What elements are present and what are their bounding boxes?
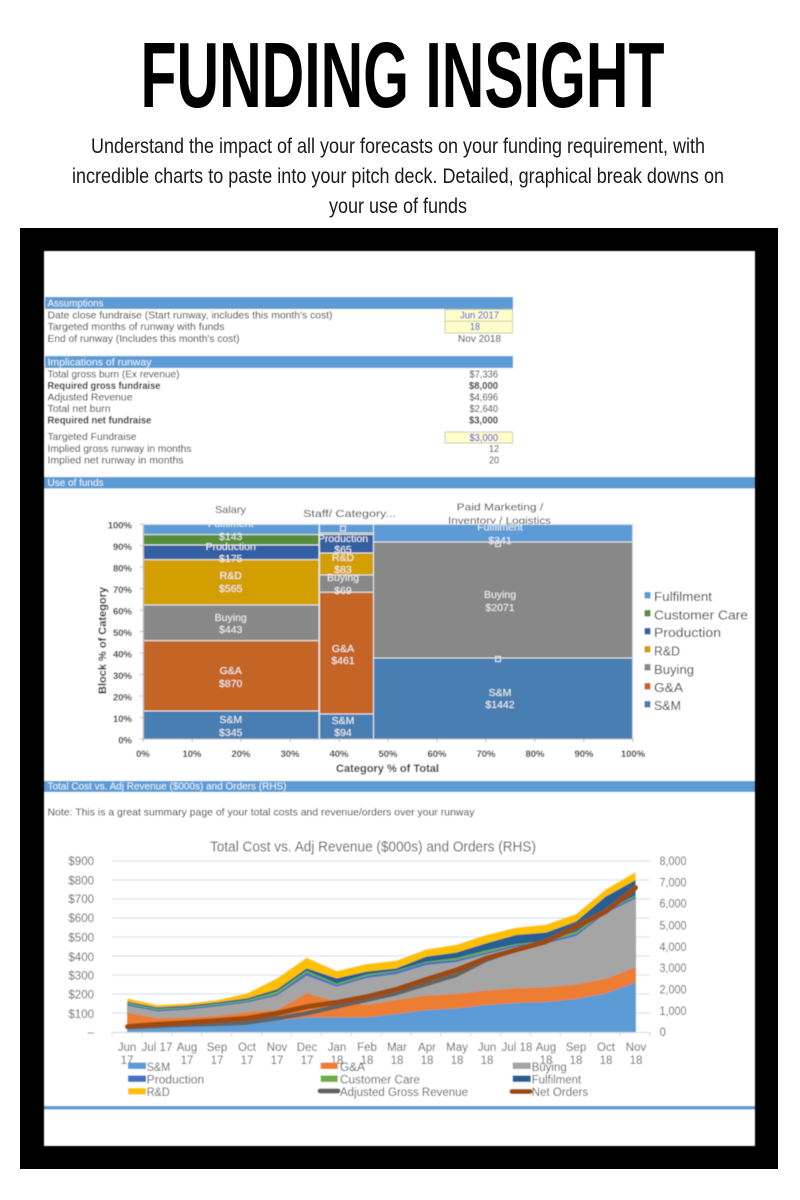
left axis labels: – — [88, 1027, 95, 1039]
mosaic axes: 10% — [182, 749, 202, 760]
panel: implications of runway: Targeted Fundraise — [48, 432, 137, 443]
mosaic legend: Production — [654, 625, 721, 640]
mosaic axes: 0% — [118, 736, 133, 746]
mosaic axes: 60% — [113, 606, 133, 618]
column headings: Inventory / Logistics — [448, 515, 551, 527]
panel: implications of runway — [45, 356, 513, 466]
mosaic axes: 50% — [378, 749, 398, 760]
area chart legend: S&M — [147, 1062, 170, 1074]
panel: implications of runway: Total gross burn (Ex revenue) — [48, 370, 180, 380]
mosaic value labels: $83 — [334, 564, 352, 576]
panel: assumptions: 18 — [470, 322, 480, 333]
area chart legend: G&A — [340, 1062, 365, 1074]
panel: assumptions — [45, 297, 513, 345]
mosaic axes: 20% — [113, 692, 133, 704]
month labels: Aug — [177, 1042, 197, 1054]
mosaic axes: 70% — [113, 585, 133, 596]
section heading: total cost vs adj revenue: Total Cost vs. Adj Revenue ($000s) and Orders (RHS) — [48, 782, 286, 792]
mosaic axes: 30% — [280, 749, 300, 760]
subtitle text block: your use of funds — [329, 195, 467, 218]
column headings — [215, 502, 551, 527]
black frame — [20, 228, 778, 1169]
area chart legend — [128, 1062, 588, 1099]
mosaic axes: 0% — [136, 749, 150, 760]
mosaic value labels: $94 — [334, 727, 352, 739]
mosaic value labels: Fulfilment — [208, 518, 254, 530]
month labels: Apr — [418, 1042, 436, 1054]
gridlines — [112, 861, 650, 1013]
left axis labels: $800 — [68, 876, 94, 888]
right axis labels: 0 — [660, 1027, 666, 1039]
mosaic column: staff — [320, 524, 374, 739]
left axis labels: $400 — [68, 952, 94, 964]
mosaic axes: Category % of Total — [336, 763, 439, 775]
month labels: 18 — [600, 1055, 612, 1067]
month labels: Mar — [387, 1042, 407, 1054]
column headings: Staff/ Category... — [303, 508, 396, 520]
month labels — [118, 1042, 646, 1067]
mosaic value labels: Production — [318, 533, 368, 545]
mosaic axes: 20% — [231, 749, 251, 760]
mosaic value labels: $461 — [331, 655, 355, 667]
panel: implications of runway: Total net burn — [48, 404, 111, 415]
mosaic value labels: Buying — [215, 612, 247, 624]
panel: assumptions: Jun 2017 — [460, 310, 499, 322]
panel: implications of runway: Implied gross runway in months — [48, 444, 192, 455]
month labels: Sep — [566, 1042, 586, 1054]
panel: implications of runway: 12 — [489, 444, 499, 455]
section heading: total cost vs adj revenue — [44, 781, 755, 792]
mosaic axes: 80% — [525, 749, 545, 760]
panel: implications of runway: $3,000 — [469, 416, 498, 426]
area chart legend: Customer Care — [340, 1074, 420, 1086]
panel: assumptions: Assumptions — [48, 298, 104, 310]
subtitle text block: Understand the impact of all your forecasts on your funding requirement, with — [91, 135, 705, 158]
month labels: 18 — [421, 1055, 433, 1067]
mosaic value labels: $341 — [488, 535, 512, 547]
month labels: Jun — [478, 1042, 496, 1054]
mosaic value labels: $69 — [334, 585, 352, 597]
mosaic value labels — [206, 518, 523, 739]
month labels: 17 — [301, 1055, 313, 1067]
mosaic value labels: Buying — [327, 572, 359, 584]
month labels: Nov — [626, 1042, 646, 1054]
mosaic legend: Customer Care — [654, 608, 748, 622]
right axis labels: 7,000 — [660, 878, 686, 890]
mosaic legend: G&A — [654, 680, 683, 695]
mosaic axes: 90% — [574, 749, 594, 760]
panel: implications of runway: $7,336 — [470, 370, 498, 380]
mosaic legend: Fulfilment — [654, 589, 712, 604]
left axis labels: $900 — [68, 856, 94, 868]
month labels: 18 — [451, 1055, 463, 1067]
month labels: Nov — [267, 1042, 287, 1054]
mosaic value labels: $565 — [219, 583, 243, 595]
area chart legend: Fulfilment — [532, 1074, 582, 1086]
mosaic chart: use of funds — [97, 502, 748, 775]
mosaic axes: 80% — [113, 564, 133, 574]
left axis labels: $200 — [68, 990, 94, 1002]
month labels: May — [446, 1042, 468, 1054]
month labels: 17 — [241, 1055, 253, 1067]
area chart legend: Buying — [532, 1062, 567, 1074]
mosaic value labels: Fulfilment — [477, 522, 523, 534]
mosaic value labels: $175 — [219, 553, 243, 565]
left axis labels — [68, 856, 95, 1039]
mosaic value labels: G&A — [220, 665, 242, 677]
panel: implications of runway: $4,696 — [470, 392, 498, 404]
month labels: 17 — [271, 1055, 283, 1067]
mosaic axes — [97, 520, 646, 775]
left axis labels: $600 — [68, 913, 94, 925]
mosaic value labels: S&M — [489, 687, 511, 699]
mosaic value labels: $443 — [219, 624, 243, 636]
area chart legend: Net Orders — [532, 1087, 588, 1099]
chart title: Total Cost vs. Adj Revenue ($000s) and Orders (RHS) — [210, 838, 536, 856]
right axis labels — [660, 856, 686, 1039]
month labels: 18 — [481, 1055, 493, 1067]
month labels: 18 — [630, 1055, 642, 1067]
mosaic axes: 100% — [108, 520, 133, 532]
note text: Note: This is a great summary page of your total costs and revenue/orders over your runway — [48, 808, 475, 818]
subtitle text block — [72, 135, 724, 218]
stacked areas — [127, 872, 636, 1032]
right axis labels: 6,000 — [660, 898, 686, 910]
right axis labels: 3,000 — [660, 963, 686, 975]
mosaic value labels: R&D — [220, 570, 242, 582]
mosaic column: salary — [144, 524, 319, 739]
mosaic value labels: $65 — [334, 544, 352, 556]
mosaic legend — [644, 589, 748, 713]
left axis labels: $500 — [68, 932, 94, 944]
panel: implications of runway: 20 — [489, 456, 499, 466]
right axis labels: 5,000 — [660, 920, 686, 932]
left axis labels: $300 — [68, 970, 94, 982]
panel: implications of runway: $2,640 — [470, 404, 498, 415]
month labels: 18 — [570, 1055, 582, 1067]
panel: implications of runway: $3,000 — [470, 433, 498, 444]
month labels: Feb — [357, 1042, 377, 1054]
mosaic value labels: $1442 — [485, 699, 515, 711]
area chart legend: Production — [147, 1074, 204, 1086]
mosaic value labels: S&M — [219, 714, 242, 726]
column headings: Paid Marketing / — [457, 502, 543, 514]
column headings: Salary — [215, 504, 247, 516]
month labels: 18 — [331, 1055, 343, 1067]
right axis labels: 8,000 — [660, 856, 686, 868]
section heading: use of funds — [44, 477, 755, 489]
panel: assumptions: Date close fundraise (Start runway, includes this month's cost) — [48, 310, 332, 322]
month labels: 18 — [540, 1055, 552, 1067]
mosaic value labels: Buying — [484, 589, 516, 601]
mosaic value labels: $2071 — [485, 602, 515, 614]
month labels: Jan — [328, 1042, 346, 1054]
mosaic value labels: G&A — [332, 643, 354, 655]
month labels: 18 — [361, 1055, 373, 1067]
left axis labels: $100 — [68, 1009, 94, 1021]
panel: implications of runway: Adjusted Revenue — [48, 392, 133, 404]
mosaic axes: 10% — [113, 714, 133, 725]
mosaic axes: 40% — [113, 650, 133, 660]
area chart: total cost vs revenue — [68, 838, 686, 1099]
month labels: 18 — [391, 1055, 403, 1067]
mosaic axes: 60% — [427, 749, 447, 760]
month labels: Aug — [536, 1042, 556, 1054]
right axis labels: 1,000 — [660, 1006, 686, 1018]
mosaic axes: Block % of Category — [97, 586, 109, 694]
month labels: 17 — [211, 1055, 223, 1067]
left axis labels: $700 — [68, 894, 94, 906]
panel: assumptions: Targeted months of runway with funds — [48, 322, 224, 333]
panel: assumptions: Nov 2018 — [458, 334, 501, 345]
panel: implications of runway: Implications of runway — [48, 358, 152, 368]
month labels: Sep — [207, 1042, 227, 1054]
mosaic legend: S&M — [654, 698, 681, 713]
panel: implications of runway: Required gross fundraise — [48, 381, 161, 392]
panel: implications of runway: Required net fundraise — [48, 416, 152, 426]
panel: implications of runway: $8,000 — [469, 381, 498, 392]
mosaic legend: Buying — [654, 662, 694, 677]
mosaic value labels: $143 — [219, 531, 243, 543]
month labels: 17 — [121, 1055, 133, 1067]
section heading: use of funds: Use of funds — [48, 478, 104, 489]
spreadsheet screenshot panel — [44, 251, 755, 1146]
mosaic value labels: Production — [206, 541, 256, 553]
mosaic column: paid marketing — [374, 524, 633, 739]
mosaic axes: 90% — [113, 542, 133, 553]
month labels: Jul 17 — [142, 1042, 172, 1054]
mosaic legend: R&D — [654, 644, 680, 658]
panel: assumptions: End of runway (Includes this month's cost) — [48, 334, 240, 345]
mosaic axes: 100% — [621, 749, 646, 760]
mosaic axes: 30% — [113, 671, 133, 682]
mosaic axes: 50% — [113, 628, 133, 639]
month labels: Jul 18 — [502, 1042, 532, 1054]
month labels: Oct — [238, 1042, 257, 1054]
month labels: Oct — [597, 1042, 616, 1054]
right axis labels: 2,000 — [660, 984, 686, 996]
mosaic axes: 40% — [329, 749, 349, 760]
area chart legend: R&D — [147, 1087, 170, 1099]
mosaic axes: 70% — [476, 749, 496, 760]
mosaic value labels: $870 — [219, 678, 243, 690]
area chart legend: Adjusted Gross Revenue — [340, 1087, 468, 1099]
right axis labels: 4,000 — [660, 942, 686, 954]
mosaic value labels: $345 — [219, 727, 243, 739]
month labels: 17 — [181, 1055, 193, 1067]
panel: implications of runway: Implied net runway in months — [48, 456, 184, 466]
baseline axis — [112, 1032, 650, 1036]
mosaic value labels: S&M — [332, 715, 354, 727]
mosaic value labels: R&D — [332, 552, 355, 564]
month labels: Jun — [118, 1042, 136, 1054]
month labels: Dec — [297, 1042, 317, 1054]
